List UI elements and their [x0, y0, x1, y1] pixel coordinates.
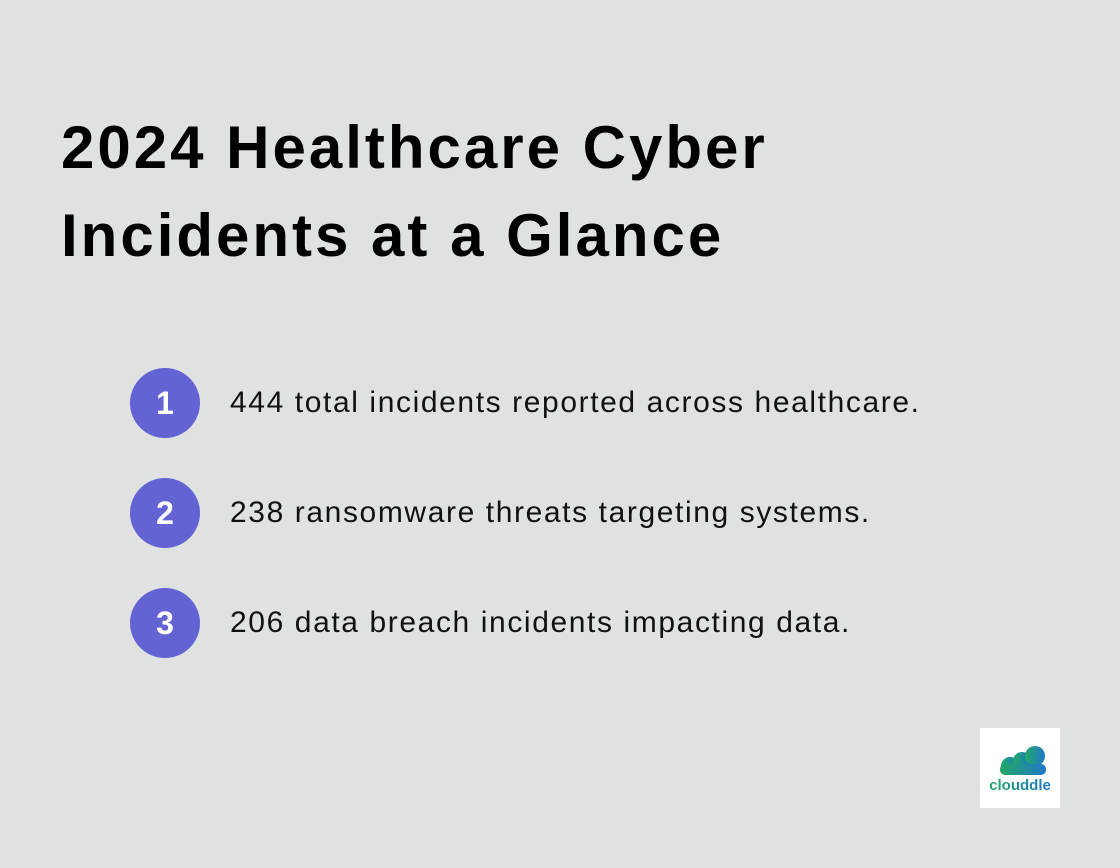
- badge 1: 1: [156, 385, 174, 421]
- item 3: [130, 588, 851, 658]
- badge 3: [130, 588, 200, 658]
- badge 1: [130, 368, 200, 438]
- badge 3: 3: [156, 605, 174, 641]
- text 1: 444 total incidents reported across healthcare.: [230, 386, 921, 419]
- item 2: [130, 478, 871, 548]
- badge 2: 2: [156, 495, 174, 531]
- title: Incidents at a Glance: [61, 202, 724, 269]
- title: [61, 114, 768, 269]
- item 1: [130, 368, 921, 438]
- logo: clouddle: [980, 728, 1060, 808]
- title: 2024 Healthcare Cyber: [61, 114, 768, 181]
- badge 2: [130, 478, 200, 548]
- text 3: 206 data breach incidents impacting data.: [230, 606, 851, 639]
- logo: clouddle: clouddle: [989, 777, 1051, 794]
- text 2: 238 ransomware threats targeting systems.: [230, 496, 871, 529]
